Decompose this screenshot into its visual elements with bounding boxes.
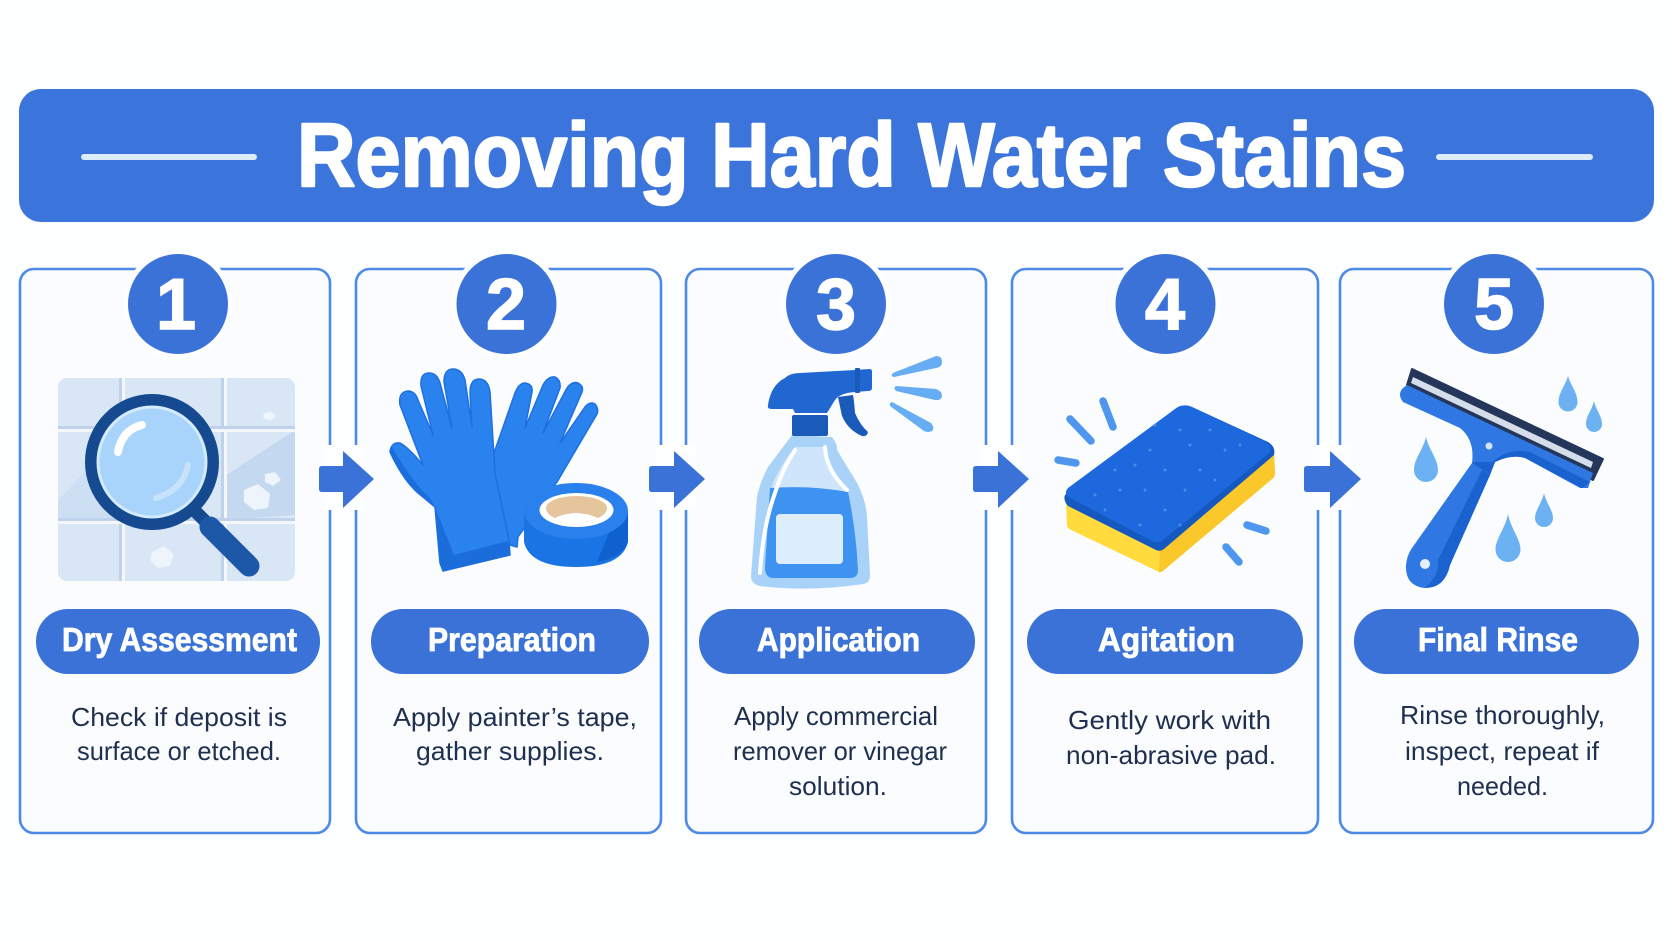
step description: Rinse thoroughly, [1400, 700, 1605, 730]
step description [393, 702, 637, 766]
icon: sponge with motion rays [1058, 401, 1275, 572]
title: Removing Hard Water Stains [297, 106, 1406, 206]
step label [1354, 609, 1639, 674]
step description: Check if deposit is [71, 702, 287, 732]
step number 1 [128, 254, 228, 354]
step label: Final Rinse [1418, 621, 1578, 658]
step description: Apply commercial [734, 701, 938, 731]
step number 4 [1116, 254, 1216, 354]
step label: Dry Assessment [62, 621, 297, 658]
step description: needed. [1457, 771, 1548, 801]
arrow: step 3 to 4 [973, 445, 1029, 510]
icon: magnifying glass over tiles [58, 378, 295, 581]
step description [733, 701, 947, 801]
step label: Preparation [428, 621, 596, 658]
step description [1400, 700, 1605, 801]
step label [36, 609, 320, 674]
panel: step 1 dry assessment [20, 254, 330, 833]
panel: step 4 agitation [1012, 254, 1318, 833]
step number 5: 5 [1474, 265, 1514, 345]
icon: spray bottle [751, 356, 942, 589]
panel: step 3 application [686, 254, 986, 833]
arrow: step 4 to 5 [1304, 445, 1361, 510]
panel: step 5 final rinse [1340, 254, 1653, 833]
arrow: step 1 to 2 [319, 445, 374, 510]
step label [699, 609, 975, 674]
panel: step 2 preparation [356, 254, 661, 833]
step number 1: 1 [156, 265, 196, 345]
step number 5 [1444, 254, 1544, 354]
step description: surface or etched. [77, 736, 281, 766]
step label: Agitation [1098, 621, 1235, 658]
icon: gloves and painter's tape [390, 369, 628, 571]
step description: Apply painter’s tape, [393, 702, 637, 732]
step description: solution. [789, 771, 887, 801]
icon: squeegee and water drops [1400, 369, 1603, 588]
step description: non-abrasive pad. [1066, 740, 1276, 770]
step description: remover or vinegar [733, 736, 947, 766]
step label [371, 609, 649, 674]
step description [71, 702, 287, 766]
step label: Application [757, 621, 920, 658]
arrow: step 2 to 3 [649, 445, 705, 510]
step description: Gently work with [1068, 705, 1271, 735]
title banner [19, 89, 1654, 222]
step description: gather supplies. [416, 736, 604, 766]
step number 3 [786, 254, 886, 354]
step number 4: 4 [1145, 265, 1185, 345]
step label [1027, 609, 1303, 674]
step number 2 [456, 254, 556, 354]
step number 3: 3 [816, 265, 856, 345]
step description [1066, 705, 1276, 770]
step number 2: 2 [486, 265, 526, 345]
step description: inspect, repeat if [1405, 736, 1600, 766]
